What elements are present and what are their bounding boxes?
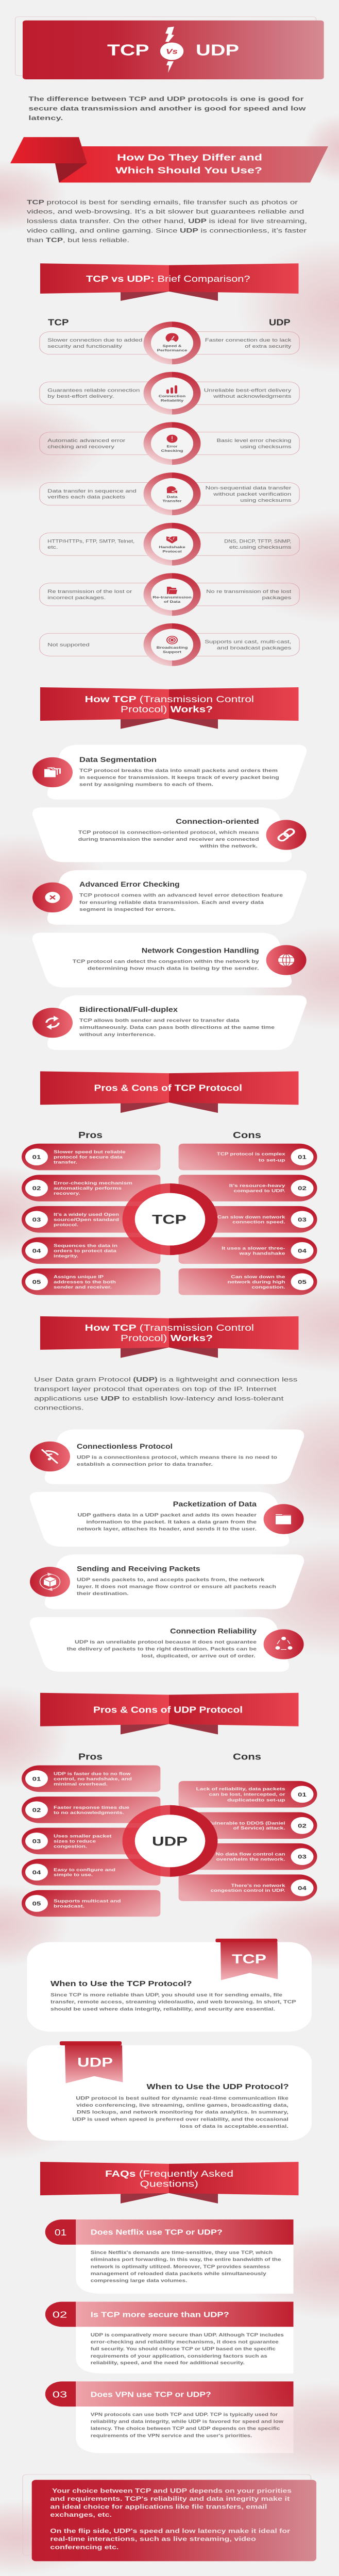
- row: data transfer: [40, 472, 299, 515]
- con 03: [179, 1843, 317, 1870]
- con 02: [179, 1812, 317, 1839]
- row: error checking: Checking: [161, 449, 183, 453]
- card: connection-oriented: within the network.: [199, 844, 258, 849]
- card: data segmentation: Data Segmentation: [79, 756, 157, 764]
- card: bidirectional full-duplex: Bidirectional/Full-duplex: [79, 1006, 178, 1013]
- row: handshake protocol: etc.: [47, 545, 58, 550]
- banner: how TCP works: How TCP (Transmission Control: [84, 694, 254, 704]
- row: broadcasting support: Broadcasting: [157, 646, 188, 650]
- pro 01: 01: [32, 1775, 41, 1782]
- paragraph: UDP intro: transport layer protocol that operates on top of the IP. Internet: [34, 1386, 276, 1393]
- con 03: No data flow control can: [215, 1852, 285, 1857]
- panel: when to use TCP: [27, 1939, 312, 2032]
- row: connection reliability: Connection: [159, 394, 186, 398]
- row: error checking: Basic level error checking: [216, 438, 291, 444]
- pro 03: 03: [32, 1838, 41, 1844]
- card: advanced error checking: for ensuring reliable data transmission. Each and every data: [79, 900, 264, 905]
- card: sending and receiving packets: their destination.: [77, 1591, 129, 1597]
- con 03: 03: [298, 1216, 307, 1223]
- row: speed and performance: Speed &: [162, 344, 182, 348]
- icon: handshake heart: [166, 536, 177, 544]
- con 02: [179, 1175, 317, 1201]
- heading ribbon: how do they differ: How Do They Differ and: [117, 152, 262, 163]
- con 03: connection speed.: [232, 1220, 285, 1225]
- center ring: UDP: UDP: [152, 1835, 188, 1849]
- center ring: TCP: TCP: [152, 1213, 187, 1227]
- con 02: 02: [298, 1822, 307, 1829]
- banner: brief comparison: TCP vs UDP: Brief Comparison?: [86, 274, 250, 284]
- row: speed and performance: Faster connection due to lack: [205, 337, 292, 343]
- conclusion panel: On the flip side, UDP's speed and low latency make it ideal for: [50, 2528, 291, 2534]
- pro 04: Easy to configure and: [54, 1868, 115, 1872]
- icon: cross in circle: [45, 892, 60, 903]
- pro 03: It’s a widely used Open: [54, 1212, 119, 1217]
- pro 02: recovery.: [54, 1191, 80, 1196]
- row: error checking: using checksums: [240, 444, 292, 449]
- card: connection reliability: the delivery of packets to the right destination. Packets can be: [67, 1647, 257, 1652]
- card: packetization of data: [30, 1492, 304, 1547]
- FAQ 01: network is optimally utilized. Moreover, TCP provides seamless: [91, 2264, 270, 2269]
- con 03: Can slow down network: [217, 1215, 285, 1219]
- card: connectionless protocol: establish a connection prior to data transfer.: [77, 1462, 213, 1467]
- pro 03: protocol.: [54, 1223, 78, 1227]
- pro 04: Sequences the data in: [54, 1244, 117, 1248]
- con 01: can be lost, intercepted, or: [209, 1792, 285, 1797]
- FAQ 02: full security. You should choose TCP or UDP based on the specific: [91, 2347, 276, 2352]
- con 05: 05: [298, 1279, 307, 1285]
- icon: lightning bolt: [165, 27, 174, 73]
- row: speed and performance: security and functionality: [47, 344, 123, 349]
- con 02: of Service) attack.: [233, 1826, 285, 1831]
- card: network congestion handling: determining how much data is being by the sender.: [88, 966, 259, 971]
- row: error checking: checking and recovery: [47, 444, 115, 449]
- row: re-transmission of data: packages: [262, 595, 292, 600]
- banner: how TCP works: Protocol) Works?: [121, 704, 213, 715]
- icon: exclamation: [167, 435, 177, 443]
- row: re-transmission of data: Re transmission of the lost or: [47, 589, 132, 595]
- heading ribbon: how do they differ: [10, 137, 328, 182]
- pro 03: sizes to reduce: [54, 1839, 96, 1844]
- pro 03: source/Open standard: [54, 1217, 119, 1222]
- row: connection reliability: Guarantees reliable connection: [47, 388, 140, 393]
- intro paragraph: [28, 96, 306, 122]
- FAQ 03: VPN protocols can use both TCP and UDP. TCP is typically used for: [91, 2412, 278, 2417]
- pro 05: [22, 1890, 160, 1917]
- conclusion panel: [23, 2475, 316, 2561]
- FAQ 02: requirements of your application, considering factors such as: [91, 2353, 267, 2359]
- banner: how TCP works: [40, 687, 299, 729]
- pro 01: Slower speed but reliable: [54, 1150, 126, 1155]
- hero title panel: UDP: [196, 41, 239, 59]
- FAQ 01: 01: [55, 2228, 66, 2238]
- row: data transfer: without packet verification: [213, 492, 291, 497]
- FAQ 03: [45, 2381, 294, 2453]
- pro 01: [22, 1144, 160, 1170]
- con 01: 01: [298, 1154, 307, 1160]
- card: bidirectional full-duplex: without any interference.: [79, 1032, 156, 1037]
- conclusion panel: an ideal choice for applications like file transfers, email: [50, 2503, 267, 2510]
- row: broadcasting support: [40, 623, 299, 666]
- intro paragraph: latency.: [28, 115, 63, 122]
- card: connection reliability: [30, 1617, 304, 1672]
- heading: pros: Pros: [78, 1130, 103, 1140]
- row: data transfer: Data: [166, 495, 178, 499]
- icon: signal bars: [166, 385, 177, 394]
- row: data transfer: Data transfer in sequence and: [47, 488, 137, 494]
- con 04: 04: [298, 1885, 307, 1891]
- banner: pros and cons of UDP: [40, 1693, 299, 1734]
- icon: wifi off: [42, 1450, 58, 1463]
- FAQ 01: management of reloaded data packets while simultaneously: [91, 2271, 267, 2276]
- pro 03: 03: [32, 1216, 41, 1223]
- row: re-transmission of data: Re-transmission: [152, 596, 192, 599]
- panel: when to use TCP: Since TCP is more reliable than UDP, you should use it for sending emails, file: [50, 1992, 282, 1998]
- banner: how UDP works: Protocol) Works?: [121, 1333, 213, 1343]
- heading: cons: Cons: [233, 1752, 261, 1762]
- con 01: duplicatedto set-up: [227, 1798, 285, 1803]
- paragraph: which to use: than TCP, but less reliable.: [27, 237, 129, 244]
- FAQ 01: [45, 2219, 293, 2294]
- banner: FAQs: FAQs (Frequently Asked: [105, 2169, 233, 2179]
- card: advanced error checking: TCP protocol comes with an advanced level error detection feature: [79, 893, 283, 898]
- icon: chain link: [277, 828, 295, 842]
- row: re-transmission of data: No re transmission of the lost: [206, 589, 291, 595]
- card: connection-oriented: TCP protocol is connection-oriented protocol, which means: [78, 830, 259, 835]
- pro 01: [22, 1766, 160, 1792]
- row: re-transmission of data: incorrect packages.: [47, 595, 106, 600]
- FAQ 01: Does Netflix use TCP or UDP?: [91, 2228, 223, 2236]
- icon: stacked folders: [44, 767, 61, 777]
- pro 05: addresses to the both: [54, 1280, 116, 1284]
- con 01: Lack of reliability, data packets: [196, 1787, 285, 1791]
- banner: pros and cons of UDP: Pros & Cons of UDP Protocol: [93, 1705, 243, 1715]
- con 02: It’s resource-heavy: [229, 1183, 285, 1189]
- card: sending and receiving packets: UDP sends packets to, and accepts packets from, the network: [77, 1577, 265, 1582]
- pro 04: simple to use.: [54, 1873, 93, 1877]
- card: network congestion handling: Network Congestion Handling: [142, 947, 259, 955]
- panel: when to use UDP: loss of data is acceptable.essential.: [180, 2124, 289, 2129]
- hero title panel: Vs: [166, 47, 178, 56]
- row: error checking: [40, 422, 299, 465]
- FAQ 03: latency. The choice between TCP and UDP depends on the specific: [91, 2426, 280, 2431]
- card: sending and receiving packets: layer. It does not manage flow control or ensure all packets reach: [77, 1584, 276, 1589]
- row: data transfer: Non-sequential data transfer: [206, 485, 292, 491]
- pro 04: [22, 1859, 160, 1886]
- row: error checking: Automatic advanced error: [47, 438, 126, 444]
- ribbon: UDP: UDP: [77, 2056, 113, 2070]
- panel: when to use TCP: should be used where data integrity, reliability, and security are essential.: [50, 2007, 275, 2012]
- FAQ 02: 02: [53, 2310, 67, 2320]
- panel: when to use TCP: When to Use the TCP Protocol?: [50, 1979, 192, 1988]
- pro 02: to no acknowledgments.: [54, 1810, 124, 1815]
- row: handshake protocol: etc.using checksums: [229, 545, 292, 550]
- pro 03: congestion.: [54, 1844, 87, 1849]
- card: advanced error checking: [32, 870, 307, 925]
- row: error checking: Error: [166, 445, 178, 448]
- card: advanced error checking: segment is inspected for errors.: [79, 907, 176, 912]
- icon: swap arrows: [46, 1016, 59, 1030]
- card: connection-oriented: during transmission the sender and receiver are connected: [78, 837, 259, 842]
- pro 04: orders to protect data: [54, 1249, 116, 1253]
- card: connectionless protocol: [30, 1430, 304, 1484]
- row: data transfer: using checksums: [240, 498, 292, 503]
- con 05: network during high: [227, 1280, 285, 1284]
- pro 01: control, no handshake, and: [54, 1777, 132, 1782]
- column heading: TCP: TCP: [48, 318, 69, 327]
- con 02: compared to UDP.: [234, 1189, 285, 1194]
- banner: how UDP works: [40, 1316, 299, 1358]
- icon: package with rotating arrows: [40, 1572, 60, 1591]
- pro 02: 02: [32, 1807, 41, 1814]
- FAQ 03: Does VPN use TCP or UDP?: [91, 2390, 211, 2399]
- icon: broadcast rings: [167, 636, 177, 644]
- card: packetization of data: information to the packet. It takes a data gram from the: [86, 1519, 257, 1525]
- paragraph: UDP intro: User Data gram Protocol (UDP) is a lightweight and connection less: [34, 1376, 297, 1383]
- conclusion panel: exchanges, etc.: [50, 2512, 112, 2518]
- con 04: There’s no network: [231, 1884, 285, 1888]
- card: connection-oriented: [32, 807, 307, 862]
- ribbon: TCP: [215, 1939, 278, 1980]
- banner: pros and cons of TCP: Pros & Cons of TCP Protocol: [94, 1083, 242, 1093]
- card: packetization of data: Packetization of Data: [173, 1501, 257, 1509]
- banner: brief comparison: [40, 263, 299, 301]
- panel: when to use UDP: When to Use the UDP Protocol?: [146, 2082, 289, 2091]
- icon: folder: [167, 587, 177, 594]
- card: data segmentation: [32, 745, 307, 800]
- icon: folder: [276, 1514, 291, 1524]
- panel: when to use UDP: [27, 2041, 312, 2141]
- banner: pros and cons of TCP: [40, 1071, 299, 1113]
- paragraph: which to use: lossless data transfer. On the other hand, UDP is ideal for live streaming,: [27, 218, 307, 225]
- pro 02: [22, 1797, 160, 1823]
- paragraph: UDP intro: connections.: [34, 1405, 84, 1412]
- pro 03: Uses smaller packet: [54, 1834, 112, 1839]
- pro 02: Error-checking mechanism: [54, 1181, 132, 1186]
- paragraph: UDP intro: [34, 1376, 297, 1412]
- card: connection-oriented: Connection-oriented: [176, 818, 259, 825]
- con 04: [179, 1238, 317, 1264]
- icon: speedometer: [166, 333, 178, 342]
- banner: FAQs: [40, 2162, 299, 2204]
- column heading: UDP: UDP: [269, 318, 291, 327]
- paragraph: UDP intro: applications use UDP to establish low-latency and loss-tolerant: [34, 1395, 283, 1402]
- FAQ 03: requirements of the VPN service and the user's priorities.: [91, 2433, 252, 2438]
- icon: three connected dots: [275, 1637, 293, 1650]
- paragraph: which to use: video calling, and online gaming. Since UDP is connectionless, it’s faster: [27, 227, 307, 234]
- pro 04: [22, 1238, 160, 1264]
- row: speed and performance: Performance: [157, 348, 187, 352]
- card: network congestion handling: TCP protocol can detect the congestion within the network by: [73, 959, 260, 964]
- con 01: [179, 1144, 317, 1170]
- panel: when to use UDP: video conferencing, live streaming, online games, broadcasting data,: [76, 2103, 289, 2108]
- panel: when to use UDP: DNS lockups, and network monitoring for data analytics. In summary,: [77, 2110, 289, 2115]
- icon: head with share nodes: [167, 486, 177, 493]
- row: connection reliability: [40, 372, 299, 415]
- card: sending and receiving packets: [30, 1554, 304, 1609]
- intro paragraph: secure data transmission and another is good for speed and low: [28, 105, 306, 112]
- row: handshake protocol: HTTP/HTTPs, FTP, SMTP, Telnet,: [47, 539, 134, 544]
- pro 05: 05: [32, 1279, 41, 1285]
- con 04: [179, 1874, 317, 1901]
- con 04: It uses a slower three-: [222, 1246, 285, 1251]
- FAQ 02: error-checking and reliability mechanisms, it does not guarantee: [91, 2340, 279, 2345]
- row: speed and performance: Slower connection due to added: [47, 337, 142, 343]
- con 04: way handshake: [239, 1251, 285, 1256]
- con 05: Can slow down the: [231, 1275, 285, 1279]
- card: data segmentation: in sequence for transmission. It keeps track of every packet being: [79, 775, 279, 780]
- row: connection reliability: without acknowledgments: [213, 394, 292, 399]
- heading: cons: Cons: [233, 1130, 261, 1140]
- card: packetization of data: network layer, attaches its header, and sends it to the user.: [77, 1527, 257, 1532]
- pro 05: sender and receiver.: [54, 1285, 112, 1290]
- ribbon: TCP: TCP: [232, 1953, 266, 1967]
- pro 04: integrity.: [54, 1254, 78, 1259]
- FAQ 02: [45, 2302, 294, 2374]
- con 01: [179, 1781, 317, 1807]
- FAQ 02: reliability, speed, and the need for additional security.: [91, 2361, 245, 2366]
- hero title panel: [15, 17, 324, 79]
- pro 03: [22, 1206, 160, 1233]
- FAQ 03: reliability and data integrity, while UDP is favored for speed and low: [91, 2419, 283, 2425]
- pro 02: Faster response times due: [54, 1805, 129, 1810]
- con 03: overwhelm the network.: [216, 1857, 285, 1862]
- row: speed and performance: of extra security: [245, 344, 292, 349]
- row: data transfer: Transfer: [162, 499, 182, 503]
- pro 03: [22, 1828, 160, 1854]
- card: advanced error checking: Advanced Error Checking: [79, 881, 180, 888]
- card: connection reliability: Connection Reliability: [170, 1628, 257, 1635]
- row: broadcasting support: Not supported: [47, 642, 90, 648]
- hero title panel: TCP: [107, 41, 149, 59]
- card: bidirectional full-duplex: TCP allows both sender and receiver to transfer data: [79, 1018, 240, 1023]
- row: data transfer: verifies each data packets: [47, 495, 126, 500]
- FAQ 03: 03: [53, 2389, 67, 2400]
- pro 05: broadcast.: [54, 1904, 84, 1909]
- row: handshake protocol: DNS, DHCP, TFTP, SNMP,: [224, 539, 291, 544]
- pro 04: 04: [32, 1247, 41, 1254]
- con 01: to set-up: [259, 1158, 285, 1163]
- pro 02: [22, 1175, 160, 1201]
- panel: when to use UDP: UDP protocol is best suited for dynamic real-time communication like: [76, 2096, 289, 2101]
- con 04: congestion control in UDP.: [211, 1888, 285, 1893]
- ribbon: UDP: [60, 2041, 123, 2083]
- FAQ 02: Is TCP more secure than UDP?: [91, 2310, 229, 2319]
- FAQ 01: compressing large data volumes.: [91, 2278, 187, 2283]
- card: connectionless protocol: UDP is a connectionless protocol, which means there is no need to: [77, 1455, 277, 1460]
- con 05: congestion.: [251, 1285, 285, 1290]
- banner: FAQs: Questions): [140, 2179, 198, 2189]
- pros and cons diagram: UDP: [22, 1752, 317, 1917]
- pros and cons diagram: TCP: [22, 1130, 317, 1295]
- row: re-transmission of data: [40, 573, 299, 616]
- heading ribbon: how do they differ: Which Should You Use?: [115, 165, 262, 176]
- pro 05: Supports multicast and: [54, 1899, 121, 1904]
- card: bidirectional full-duplex: simultaneously. Data can pass both directions at the same time: [79, 1025, 275, 1030]
- card: packetization of data: UDP gathers data in a UDP packet and adds its own header: [77, 1513, 257, 1518]
- con 01: 01: [298, 1791, 307, 1798]
- con 03: [179, 1206, 317, 1233]
- center ring: UDP: [123, 1805, 217, 1877]
- con 03: 03: [298, 1854, 307, 1860]
- row: broadcasting support: Support: [163, 650, 182, 654]
- con 05: [179, 1268, 317, 1295]
- row: re-transmission of data: of Data: [164, 600, 181, 604]
- intro paragraph: The difference between TCP and UDP protocols is one is good for: [28, 96, 304, 103]
- card: data segmentation: sent by assigning numbers to each of them.: [79, 782, 213, 787]
- card: data segmentation: TCP protocol breaks the data into small packets and orders them: [79, 768, 278, 773]
- row: connection reliability: Reliability: [161, 398, 184, 402]
- pro 01: 01: [32, 1154, 41, 1160]
- row: connection reliability: by best-effort delivery.: [47, 394, 114, 399]
- row: broadcasting support: Supports uni cast, multi-cast,: [205, 639, 291, 645]
- comparison table: [40, 318, 299, 666]
- icon: globe: [278, 954, 294, 966]
- pro 02: 02: [32, 1185, 41, 1192]
- conclusion panel: real-time interactions, such as live streaming, video: [50, 2536, 256, 2543]
- pro 01: UDP is faster due to no flow: [54, 1772, 130, 1776]
- con 02: 02: [298, 1185, 307, 1192]
- card: bidirectional full-duplex: [32, 995, 307, 1050]
- row: connection reliability: Unreliable best-effort delivery: [204, 388, 292, 393]
- card: sending and receiving packets: Sending and Receiving Packets: [77, 1565, 200, 1573]
- conclusion panel: Your choice between TCP and UDP depends on your priorities: [52, 2487, 292, 2494]
- pro 02: automatically performs: [54, 1186, 122, 1191]
- FAQ 01: Since Netflix's demands are time-sensitive, they use TCP, which: [91, 2250, 273, 2256]
- pro 01: transfer.: [54, 1160, 77, 1165]
- card: connection reliability: lost, duplicated, or arrive out of order.: [142, 1653, 256, 1658]
- con 01: TCP protocol is complex: [217, 1152, 285, 1157]
- heading: pros: Pros: [78, 1752, 103, 1762]
- paragraph: which to use: TCP protocol is best for sending emails, file transfer such as photos or: [27, 199, 298, 206]
- pro 01: minimal overhead.: [54, 1782, 108, 1787]
- card: connection reliability: UDP is an unreliable protocol because it does not guarantee: [75, 1639, 257, 1645]
- panel: when to use TCP: transfer, remote access, streaming video/audio, and web browsing. In short, TCP: [50, 1999, 296, 2005]
- card: connectionless protocol: Connectionless Protocol: [77, 1443, 173, 1450]
- pro 05: Assigns unique IP: [54, 1275, 104, 1279]
- FAQ 01: eliminates port forwarding. In this way, the entire bandwidth of the: [91, 2257, 281, 2262]
- paragraph: which to use: [27, 199, 307, 244]
- banner: how UDP works: How TCP (Transmission Control: [84, 1323, 254, 1333]
- pro 04: 04: [32, 1869, 41, 1875]
- con 04: 04: [298, 1247, 307, 1254]
- pro 05: 05: [32, 1900, 41, 1907]
- conclusion panel: and requirements. TCP's reliability and data integrity make it: [50, 2496, 290, 2502]
- con 02: Vulnerable to DDOS (Daniel: [208, 1821, 285, 1826]
- paragraph: which to use: videos, and web-browsing. It’s a bit slower but guarantees reliable and: [27, 208, 304, 215]
- row: handshake protocol: [40, 523, 299, 566]
- conclusion panel: conferencing etc.: [50, 2544, 118, 2550]
- panel: when to use UDP: UDP is used when speed is preferred over reliability, and the occasional: [72, 2117, 289, 2122]
- row: broadcasting support: and broadcast packages: [217, 646, 292, 651]
- pro 01: protocol for secure data: [54, 1155, 123, 1160]
- pro 05: [22, 1268, 160, 1295]
- FAQ 02: UDP is comparatively more secure than UDP. Although TCP includes: [91, 2332, 284, 2338]
- row: speed and performance: [40, 321, 299, 364]
- card: network congestion handling: [32, 933, 307, 988]
- center ring: TCP: [123, 1183, 217, 1255]
- row: handshake protocol: Handshake: [159, 545, 185, 549]
- row: handshake protocol: Protocol: [162, 549, 182, 553]
